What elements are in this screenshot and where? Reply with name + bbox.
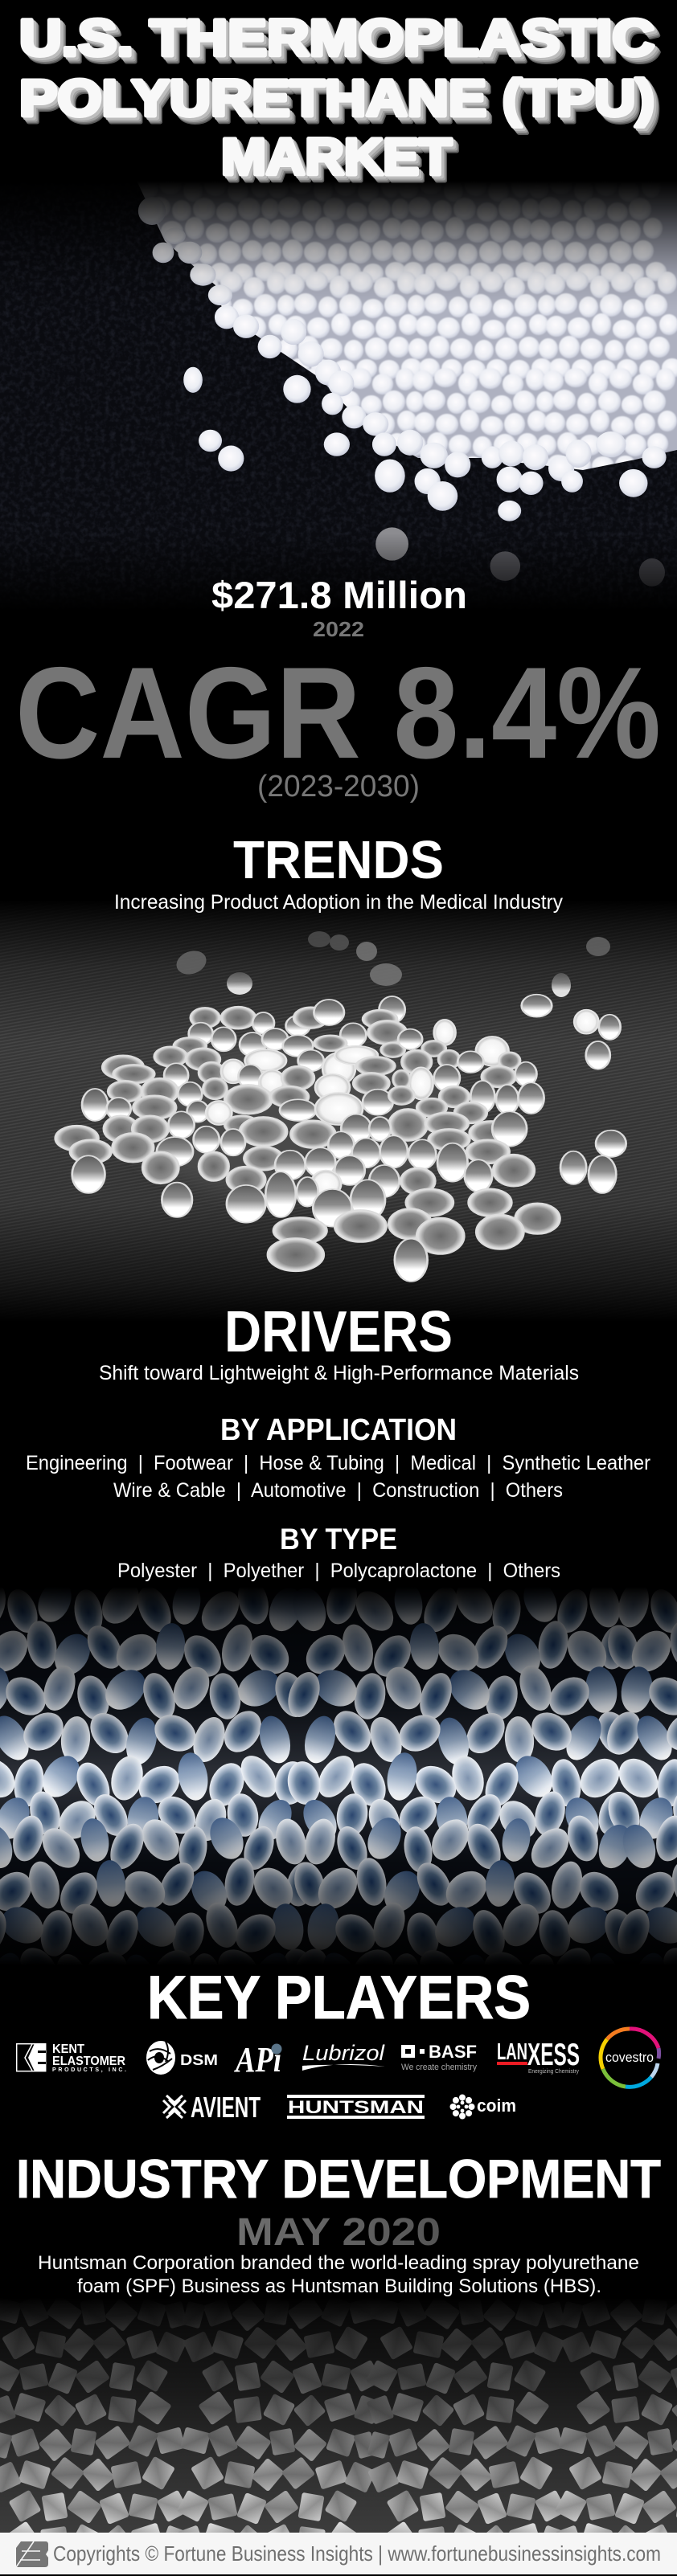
photo: clear pellets on grey fabric (0, 900, 677, 1322)
logo: Coim (450, 2094, 516, 2120)
application list line 1: Engineering | Footwear | Hose & Tubing | Medical | Synthetic Leather (26, 1452, 650, 1474)
logo: Avient: AVIENT (191, 2091, 261, 2124)
CAGR period: (2023-2030) (257, 770, 420, 803)
logo: Lanxess (497, 2038, 580, 2075)
heading: trends: TRENDS (233, 830, 444, 890)
type list: Polyester | Polyether | Polycaprolactone | Others (117, 1560, 560, 1582)
market value year: 2022 (313, 617, 364, 641)
photo: white TPU pellets on dark surface (0, 175, 677, 611)
development date: MAY 2020 (236, 2211, 441, 2254)
logo: Kent Elastomer (17, 2042, 126, 2073)
logo: Kent Elastomer: PRODUCTS, INC. (52, 2067, 126, 2073)
logo: Kent Elastomer: KENT (52, 2042, 84, 2056)
logo: Avient (163, 2091, 261, 2124)
logo: API: APi (234, 2040, 282, 2079)
heading: drivers: DRIVERS (224, 1300, 453, 1364)
development text: foam (SPF) Business as Huntsman Building Solutions (HBS). (77, 2275, 601, 2297)
logo: Huntsman (287, 2095, 425, 2119)
photo: TPU crystals (0, 2304, 677, 2533)
development text: Huntsman Corporation branded the world-leading spray polyurethane (38, 2252, 639, 2274)
logo: Covestro: covestro (605, 2050, 654, 2065)
logo: Lubrizol: Lubrizol (302, 2041, 385, 2065)
company logos (17, 2029, 659, 2124)
title line 1: U.S. THERMOPLASTIC (19, 9, 654, 67)
icon: Fortune Business Insights logo (16, 2541, 48, 2567)
title line 3: MARKET (221, 128, 452, 186)
market value: $271.8 Million (211, 574, 467, 616)
logo: Covestro (601, 2029, 659, 2087)
logo: Lanxess: LAN (497, 2039, 527, 2065)
footer (0, 2533, 677, 2574)
logo: Huntsman: HUNTSMAN (288, 2097, 424, 2117)
heading: by application: BY APPLICATION (220, 1413, 457, 1447)
heading: key players: KEY PLAYERS (147, 1964, 531, 2032)
development text (38, 2252, 639, 2297)
title line 2: POLYURETHANE (TPU) (19, 69, 654, 127)
logo: Coim: coim (477, 2096, 516, 2116)
application list line 2: Wire & Cable | Automotive | Construction | Others (113, 1479, 563, 1502)
logo: Lanxess: XESS (527, 2038, 580, 2072)
drivers text: Shift toward Lightweight & High-Performance Materials (99, 1362, 579, 1384)
logo: Lanxess: Energizing Chemistry (528, 2069, 579, 2075)
logo: BASF (401, 2042, 477, 2072)
title (19, 9, 654, 186)
logo: BASF: We create chemistry (401, 2063, 477, 2072)
logo: BASF: BASF (429, 2042, 477, 2062)
photo: blue-tinted translucent pellets (0, 1590, 677, 1961)
heading: by type: BY TYPE (280, 1523, 397, 1556)
trends text: Increasing Product Adoption in the Medical Industry (114, 891, 563, 914)
logo: DSM: DSM (180, 2052, 218, 2068)
logo: Kent Elastomer: ELASTOMER (52, 2055, 125, 2068)
logo: DSM (146, 2041, 218, 2075)
